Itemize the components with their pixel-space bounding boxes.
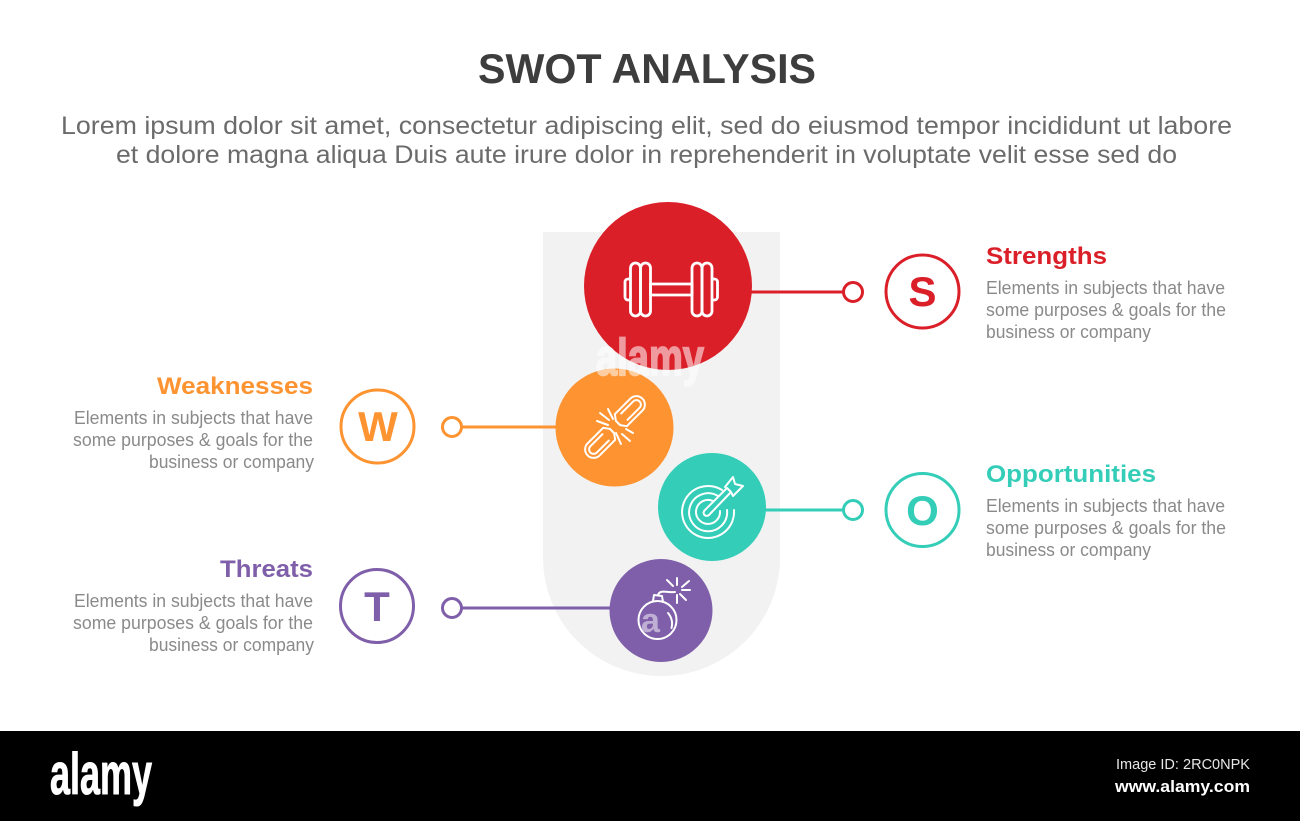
connector: strengths [750, 282, 862, 302]
icon: target and arrow [682, 477, 743, 538]
badge: W [341, 390, 414, 463]
circle: opportunities with target icon [658, 453, 766, 561]
icon: dumbbell [625, 263, 718, 316]
circle: weaknesses with broken chain icon [556, 368, 674, 486]
panel: grey rounded backdrop [543, 232, 780, 676]
text block: strengths: some purposes & goals for the [986, 300, 1226, 320]
text block: weaknesses: Elements in subjects that have [74, 408, 313, 428]
text block: opportunities [986, 461, 1226, 560]
badge: S [886, 255, 959, 328]
badge: T [340, 570, 414, 642]
connector: threats [442, 598, 612, 618]
circle: strengths with dumbbell icon [584, 202, 752, 370]
badge: O [886, 474, 959, 546]
footer bar [0, 731, 1300, 821]
subtitle text: et dolore magna aliqua Duis aute irure dolor in reprehenderit in voluptate velit esse sed do [116, 141, 1177, 169]
circle: threats with bomb icon [610, 559, 712, 662]
text block: opportunities: business or company [986, 540, 1151, 560]
icon: bomb [638, 578, 690, 639]
text block: strengths: Elements in subjects that have [986, 278, 1225, 298]
text block: weaknesses: some purposes & goals for the [73, 430, 313, 450]
badge: W: W [358, 403, 398, 450]
badge: S: S [908, 268, 937, 315]
text block: threats [73, 556, 314, 655]
footer image id: Image ID: 2RC0NPK [1116, 756, 1250, 773]
footer url: www.alamy.com [1114, 777, 1250, 796]
text block: opportunities: Opportunities [986, 461, 1156, 488]
connector: opportunities [764, 500, 862, 520]
watermark fragment: a [641, 602, 661, 640]
text block: threats: business or company [149, 635, 314, 655]
text block: strengths [986, 243, 1226, 342]
text block: opportunities: Elements in subjects that have [986, 496, 1225, 516]
text block: threats: Elements in subjects that have [74, 591, 313, 611]
watermark: alamy [596, 329, 704, 387]
text block: opportunities: some purposes & goals for the [986, 518, 1226, 538]
footer logo: alamy [50, 742, 152, 807]
title: SWOT ANALYSIS [478, 45, 816, 92]
text block: weaknesses [73, 373, 314, 472]
badge: O: O [906, 487, 939, 534]
text block: weaknesses: business or company [149, 452, 314, 472]
text block: strengths: business or company [986, 322, 1151, 342]
connector: weaknesses [442, 418, 558, 436]
text block: threats: some purposes & goals for the [73, 613, 313, 633]
subtitle text [61, 112, 1232, 169]
text block: threats: Threats [220, 556, 313, 583]
badge: T: T [364, 583, 390, 630]
subtitle text: Lorem ipsum dolor sit amet, consectetur adipiscing elit, sed do eiusmod tempor incididunt ut labore [61, 112, 1232, 140]
icon: broken chain [582, 393, 648, 461]
text block: strengths: Strengths [986, 243, 1107, 270]
text block: weaknesses: Weaknesses [157, 373, 313, 400]
